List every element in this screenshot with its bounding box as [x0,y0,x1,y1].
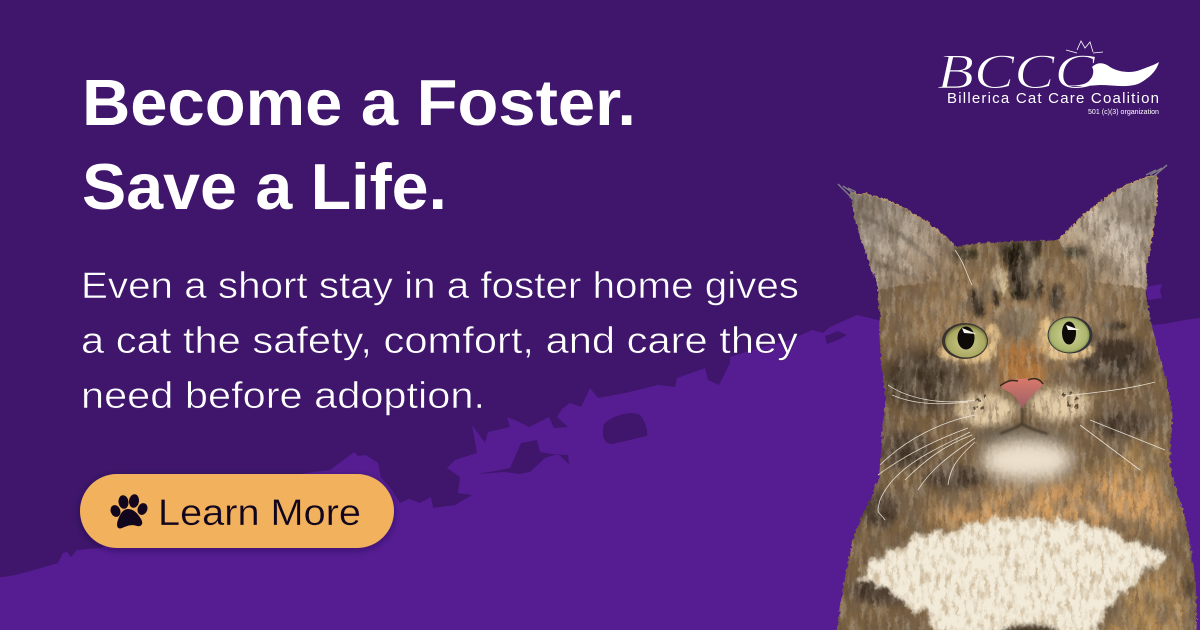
torn fleck behind the cat [1146,284,1162,300]
logo: BCCC [937,41,1159,116]
logo name: Billerica Cat Care Coalition [947,90,1159,107]
forehead stripes [951,240,1127,330]
cat right eye [1048,316,1092,354]
nose bridge [1000,342,1046,385]
body text: need before adoption. [81,375,485,416]
head warm tone [905,260,1135,380]
orange lower right [1104,556,1194,630]
ear rims [850,175,1158,273]
body text [81,265,799,416]
body text: a cat the safety, comfort, and care they [81,320,799,361]
logo subline: 501 (c)(3) organization [1088,107,1159,116]
icon: paw [109,494,149,528]
body text: Even a short stay in a foster home gives [81,265,799,306]
torn hole: lower notch [477,440,569,474]
eye sockets [938,318,1095,363]
cream chest [858,518,1168,630]
button label: Learn More [158,492,361,533]
chin [981,439,1073,481]
cat nose [1000,378,1048,434]
cat fur base [820,160,1200,630]
torn hole: fleck near the cat [825,331,847,344]
logo tail [1062,62,1159,86]
cat whiskers [878,250,1165,520]
right ear [1058,175,1157,290]
left ear [850,193,957,290]
logo cat ears and whiskers [1066,41,1103,53]
logo letters: BCCC [937,43,1096,99]
muzzle shadow [975,425,1078,446]
dark cheek right [1072,338,1152,382]
dark flank markings [847,342,1195,604]
cat left eye [942,323,988,359]
pale forehead streaks [989,258,1043,338]
tabby mottling [820,240,1200,630]
button: learn more [80,474,394,548]
cat ear tufts [838,165,1167,196]
photo: tabby cat [820,160,1200,630]
ear streaks [860,190,1150,285]
dark cheek left [883,350,967,410]
fur texture [820,160,1200,630]
chest lower shadow [1000,625,1060,630]
orange neck [925,472,1180,530]
muzzle [955,387,1090,427]
title: Save a Life. [82,150,447,223]
light fur texture [820,160,1200,630]
tan lower head [1112,440,1168,500]
muzzle spots [973,391,1079,410]
background: torn lighter purple shape [0,284,1200,630]
title [82,66,636,223]
title: Become a Foster. [82,66,636,139]
torn hole: upper blob [603,413,647,444]
